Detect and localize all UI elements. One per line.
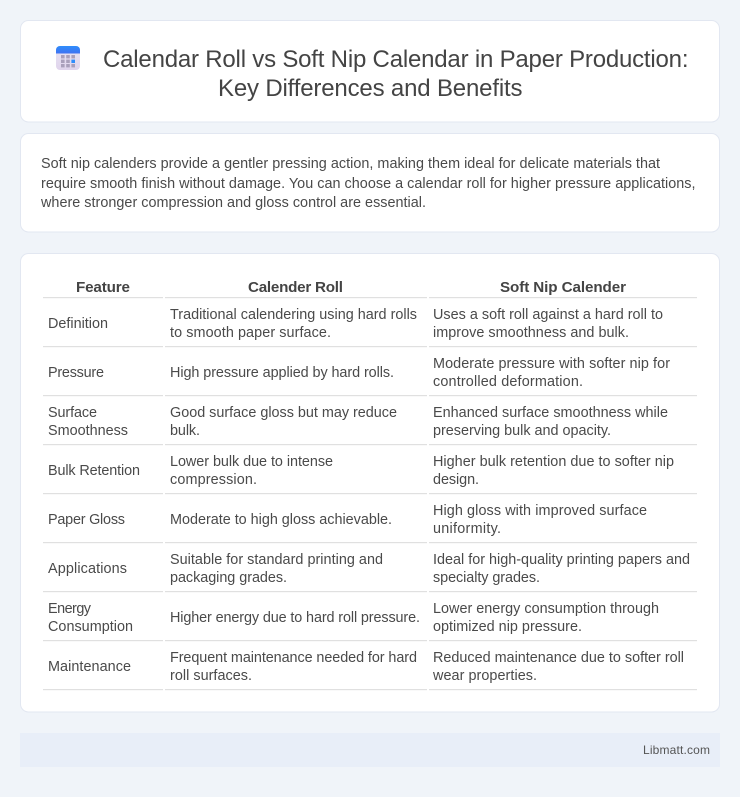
row: bulk retention: compression. [170,472,257,488]
row: pressure: Moderate pressure with softer nip for [433,356,670,372]
row: bulk retention: Higher bulk retention due to softer nip [433,454,674,470]
row: energy consumption: Higher energy due to hard roll pressure. [170,610,420,626]
row: energy consumption: Consumption [48,619,133,635]
panel: introduction [20,134,720,232]
row: maintenance [48,650,684,684]
row: paper gloss: Paper Gloss [48,512,125,528]
table header: Soft Nip Calender [500,279,626,296]
row: paper gloss: Moderate to high gloss achievable. [170,512,392,528]
row: surface smoothness: bulk. [170,423,200,439]
row: applications: specialty grades. [433,570,540,586]
row: bulk retention [48,454,674,488]
row: maintenance: roll surfaces. [170,668,252,684]
row: definition: Uses a soft roll against a hard roll to [433,307,663,323]
title [103,46,688,102]
row: definition: Traditional calendering using hard rolls [170,307,417,323]
row: maintenance: Frequent maintenance needed for hard [170,650,417,666]
footer [20,733,720,767]
row: surface smoothness [48,405,668,439]
row: pressure [48,356,670,390]
row: surface smoothness: preserving bulk and opacity. [433,423,611,439]
row: energy consumption: optimized nip pressure. [433,619,582,635]
row: applications [48,552,690,586]
title: Key Differences and Benefits [218,75,522,102]
row: surface smoothness: Smoothness [48,423,128,439]
row: definition [48,307,663,341]
panel: comparison table [20,254,720,712]
row: applications: Applications [48,561,127,577]
row: energy consumption [48,601,659,635]
row: energy consumption: Energy [48,601,92,617]
row: surface smoothness: Enhanced surface smoothness while [433,405,668,421]
row: definition: to smooth paper surface. [170,325,331,341]
panel: title card [20,20,720,122]
intro text: where stronger compression and gloss control are essential. [40,195,426,211]
row: paper gloss [48,503,647,537]
intro text [40,156,696,211]
row: energy consumption: Lower energy consumption through [433,601,659,617]
icon: calendar [56,46,80,70]
row: applications: Ideal for high-quality printing papers and [433,552,690,568]
footer: Libmatt.com [643,743,710,757]
row: maintenance: Reduced maintenance due to softer roll [433,650,684,666]
intro text: Soft nip calenders provide a gentler pressing action, making them ideal for delicate materials that [41,156,660,172]
row: paper gloss: uniformity. [433,521,501,537]
row: pressure: High pressure applied by hard rolls. [170,365,394,381]
table header: Feature [76,279,130,296]
row: maintenance: Maintenance [48,659,131,675]
row: bulk retention: Bulk Retention [48,463,140,479]
row: paper gloss: High gloss with improved surface [433,503,647,519]
row: bulk retention: design. [433,472,479,488]
row: definition: Definition [48,316,108,332]
row: pressure: controlled deformation. [433,374,583,390]
title: Calendar Roll vs Soft Nip Calendar in Paper Production: [103,46,688,73]
row: definition: improve smoothness and bulk. [433,325,629,341]
table header: Calender Roll [248,279,343,296]
row: applications: packaging grades. [170,570,287,586]
row: pressure: Pressure [48,365,104,381]
row: surface smoothness: Surface [48,405,97,421]
row: maintenance: wear properties. [432,668,537,684]
row: bulk retention: Lower bulk due to intense [170,454,333,470]
row: applications: Suitable for standard printing and [170,552,383,568]
row: surface smoothness: Good surface gloss but may reduce [170,405,397,421]
table header [76,279,626,296]
intro text: require smooth finish without damage. You can choose a calendar roll for higher pressure applications, [41,176,696,192]
